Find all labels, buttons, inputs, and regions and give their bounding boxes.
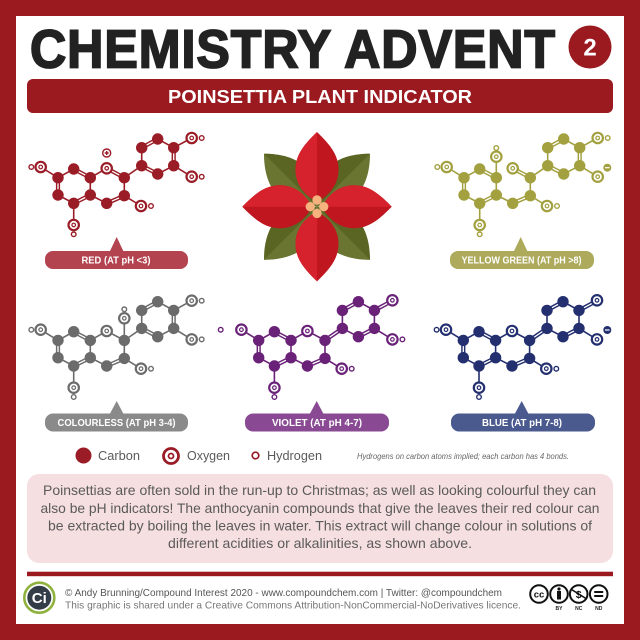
flower centre	[306, 195, 328, 218]
text panel: explanation: be extracted by boiling the leaves in water. This extract will change colour in solutions of	[48, 518, 592, 534]
red petals	[242, 132, 392, 281]
legend	[76, 448, 569, 464]
icon: cc: cc	[534, 590, 544, 600]
text panel: explanation: Poinsettias are often sold in the run-up to Christmas; as well as looking colourful they can	[43, 483, 596, 498]
legend: carbon	[76, 448, 140, 464]
panel: colourless molecule	[29, 296, 204, 432]
heading banner: POINSETTIA PLANT INDICATOR	[168, 86, 472, 107]
legend: hydrogen: Hydrogen	[267, 448, 322, 463]
icon: by: BY	[556, 606, 563, 612]
logo: Compound Interest: Ci	[32, 590, 47, 607]
footer divider	[27, 572, 613, 576]
number badge: 2	[583, 34, 597, 62]
molecule: colourless form	[29, 296, 204, 399]
panel: blue molecule	[434, 295, 611, 432]
label: yellow green: YELLOW GREEN (AT pH >8)	[462, 255, 582, 267]
heading banner	[27, 79, 613, 113]
label: red	[45, 237, 188, 269]
legend: carbon: Carbon	[98, 448, 140, 463]
illustration: poinsettia flower	[242, 132, 392, 281]
label: colourless	[45, 401, 188, 432]
title: CHEMISTRY ADVENT	[30, 20, 556, 80]
molecule: red flavylium cation	[29, 133, 204, 237]
label: colourless: COLOURLESS (AT pH 3-4)	[58, 417, 176, 429]
label: violet: VIOLET (AT pH 4-7)	[272, 417, 362, 429]
molecule: blue form	[434, 295, 611, 399]
text panel: explanation	[27, 474, 613, 563]
label: blue: BLUE (AT pH 7-8)	[482, 417, 562, 429]
molecule: violet form	[218, 295, 405, 399]
panel: red molecule	[29, 133, 204, 269]
legend note: Hydrogens on carbon atoms implied; each carbon has 4 bonds.	[357, 452, 569, 461]
logo: Compound Interest	[24, 583, 54, 613]
icon: nc	[570, 585, 588, 612]
number badge	[568, 26, 612, 68]
label: red: RED (AT pH <3)	[82, 255, 150, 267]
panel: yellow green molecule	[435, 133, 611, 269]
icon: nc: NC	[575, 606, 583, 612]
label: yellow green	[450, 237, 594, 269]
legend: oxygen: Oxygen	[187, 448, 230, 463]
icon: nc: $	[576, 589, 582, 601]
legend: oxygen	[164, 448, 230, 464]
molecule: yellow green form	[435, 133, 611, 237]
footer credits: This graphic is shared under a Creative Commons Attribution-NonCommercial-NoDerivatives licence.	[65, 600, 521, 612]
footer credits	[65, 587, 521, 612]
licence icons	[530, 585, 608, 612]
green leaves	[264, 154, 370, 260]
text panel: explanation: different acidities or alkalinities, as shown above.	[168, 536, 472, 551]
icon: nd: ND	[595, 606, 603, 612]
panel: violet molecule	[218, 295, 405, 432]
text panel: explanation: also be pH indicators! The anthocyanin compounds that give the leaves their red colour can	[40, 501, 600, 516]
footer credits: © Andy Brunning/Compound Interest 2020 - www.compoundchem.com | Twitter: @compoundchem	[65, 587, 502, 599]
label: violet	[245, 401, 389, 432]
label: blue	[451, 401, 595, 432]
